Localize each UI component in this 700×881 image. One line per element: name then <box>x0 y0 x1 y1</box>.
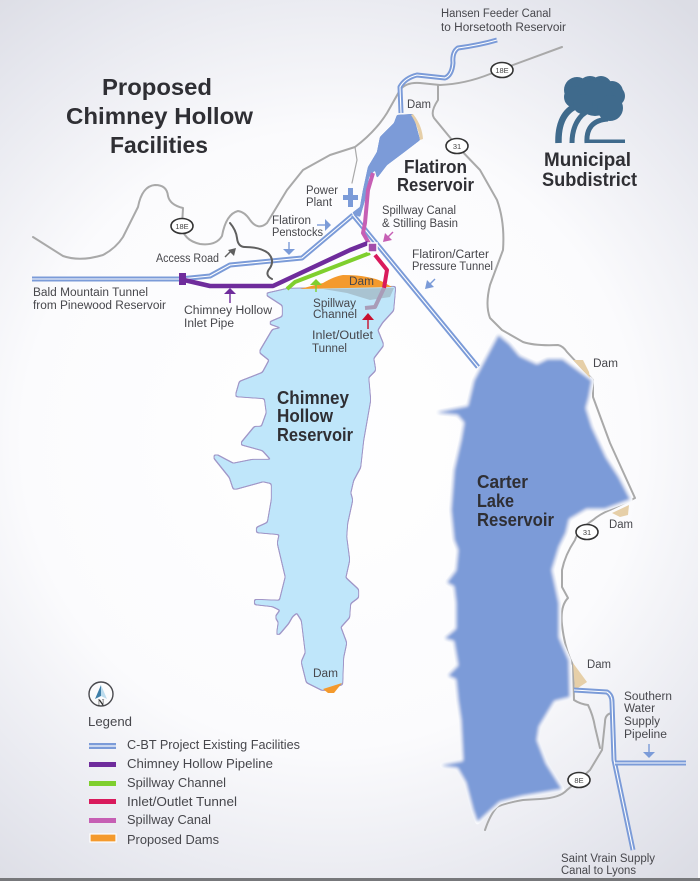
spillway channel <box>287 253 370 289</box>
icon: north compass <box>89 682 113 708</box>
road: 31 <box>433 85 635 748</box>
label: Spillway Channel <box>313 298 357 321</box>
label: Flatiron/Carter Pressure Tunnel <box>412 249 493 273</box>
label: Chimney Hollow Reservoir <box>277 388 353 445</box>
label: Chimney Hollow Inlet Pipe: Inlet Pipe <box>184 318 234 330</box>
label: proposed dam north: Dam <box>349 276 374 288</box>
legend item: Inlet/Outlet Tunnel <box>89 795 237 809</box>
label: Flatiron Reservoir: Reservoir <box>397 175 474 195</box>
arrow: inlet pipe <box>224 288 236 303</box>
label: Power Plant: Plant <box>306 197 333 209</box>
label: Bald Mountain Tunnel: Bald Mountain Tunnel <box>33 287 148 299</box>
arrow: pressure tunnel <box>425 279 435 289</box>
label: Chimney Hollow Reservoir: Reservoir <box>277 425 353 445</box>
label: Chimney Hollow dam south: Dam <box>313 668 338 680</box>
reservoir: Chimney Hollow <box>214 287 395 690</box>
label: Southern Water Supply Pipeline: Supply <box>624 716 660 728</box>
label: Inlet/Outlet Tunnel <box>312 330 374 355</box>
road: power plant spur <box>352 147 357 183</box>
highway shields <box>171 62 598 788</box>
label: Hansen Feeder Canal: to Horsetooth Reservoir <box>441 22 566 34</box>
shield: 31 north <box>446 138 468 154</box>
label: Flatiron Reservoir <box>397 157 474 195</box>
arrow: southern pipeline <box>643 744 655 758</box>
arrow: penstocks down <box>283 242 295 255</box>
shield: 18E north: 18E <box>495 66 509 75</box>
arrow: access road <box>225 248 236 257</box>
legend item: Spillway Canal <box>89 813 211 827</box>
label: Southern Water Supply Pipeline: Water <box>624 703 655 715</box>
title <box>66 74 253 158</box>
icon: power plant <box>343 188 358 207</box>
label: Spillway Canal and Stilling Basin <box>382 205 458 230</box>
legend item: Proposed Dams: Proposed Dams <box>127 833 219 847</box>
title: Proposed <box>102 74 212 100</box>
shield: 8E <box>568 772 590 788</box>
proposed dam: south <box>323 683 342 693</box>
arrows <box>224 219 655 758</box>
shield: 31 south: 31 <box>583 528 591 537</box>
label: Carter dam north: Dam <box>593 358 618 370</box>
label: Chimney Hollow Inlet Pipe <box>184 305 273 330</box>
road: 18E <box>33 47 562 259</box>
label: Chimney Hollow Reservoir: Chimney <box>277 388 349 408</box>
stilling basin <box>368 243 377 252</box>
label: Carter Lake Reservoir: Carter <box>477 472 528 492</box>
shield: 31 north: 31 <box>453 142 461 151</box>
inlet/outlet tunnel <box>365 255 387 308</box>
legend item: Spillway Channel: Spillway Channel <box>127 776 226 790</box>
label: Power Plant: Power <box>306 185 338 197</box>
label: Flatiron Penstocks <box>272 215 323 239</box>
label: Hansen Feeder Canal: Hansen Feeder Canal <box>441 8 551 20</box>
label: Spillway Channel: Channel <box>313 309 357 321</box>
legend item: Proposed Dams <box>90 833 219 847</box>
shield: 8E: 8E <box>574 776 584 785</box>
legend item: Spillway Channel <box>89 776 226 790</box>
label: Spillway Canal and Stilling Basin: Spillway Canal <box>382 205 456 217</box>
Saint Vrain Supply Canal <box>574 690 633 850</box>
proposed dam: north <box>300 275 394 300</box>
legend item: Inlet/Outlet Tunnel: Inlet/Outlet Tunnel <box>127 795 237 809</box>
reservoir: Carter Lake <box>437 333 632 824</box>
label: Bald Mountain Tunnel <box>33 287 166 312</box>
label: Flatiron Penstocks: Penstocks <box>272 227 323 239</box>
icon: north compass: N <box>98 698 105 708</box>
label: Carter Lake Reservoir: Lake <box>477 491 514 511</box>
title: Facilities <box>110 132 208 158</box>
shield: 31 south <box>576 524 598 540</box>
label: Southern Water Supply Pipeline <box>624 691 672 741</box>
dam: Carter east <box>612 505 629 517</box>
label: Chimney Hollow Inlet Pipe: Chimney Hollow <box>184 305 273 317</box>
label: Carter Lake Reservoir <box>477 472 554 530</box>
label: Carter dam east: Dam <box>609 519 633 531</box>
arrow: spillway channel <box>310 279 322 292</box>
shield: 18E north <box>491 62 513 78</box>
Bald Mountain Tunnel and Flatiron Penstocks <box>32 215 353 279</box>
label: Southern Water Supply Pipeline: Southern <box>624 691 672 703</box>
label: Bald Mountain Tunnel: from Pinewood Reservoir <box>33 300 166 312</box>
label: Carter Lake Reservoir: Reservoir <box>477 510 554 530</box>
label: Chimney Hollow Reservoir: Hollow <box>277 406 334 426</box>
arrow: spillway canal <box>383 232 393 242</box>
shield: 18E west: 18E <box>175 222 189 231</box>
heading: Municipal Subdistrict: Municipal <box>544 150 631 171</box>
heading: Municipal Subdistrict: Subdistrict <box>542 170 638 191</box>
dam: Flatiron <box>411 114 423 140</box>
label: Carter dam south: Dam <box>587 659 611 671</box>
Chimney Hollow pipeline <box>184 243 368 286</box>
label: Flatiron/Carter Pressure Tunnel: Pressure Tunnel <box>412 261 493 273</box>
label: Saint Vrain Supply Canal: Canal to Lyons <box>561 865 636 877</box>
label: Spillway Canal and Stilling Basin: & Stilling Basin <box>382 218 458 230</box>
label: Access Road: Access Road <box>156 253 219 265</box>
legend item: Chimney Hollow Pipeline: Chimney Hollow Pipeline <box>127 757 273 771</box>
legend item: Spillway Canal: Spillway Canal <box>127 813 211 827</box>
label: Flatiron dam: Dam <box>407 99 431 111</box>
reservoir: Flatiron <box>352 114 420 217</box>
Southern Water Supply Pipeline <box>615 760 686 766</box>
spillway canal <box>363 173 373 245</box>
road: 8E <box>485 713 612 830</box>
legend <box>88 714 300 847</box>
legend item: C-BT Project Existing Facilities: C-BT Project Existing Facilities <box>127 738 300 752</box>
label: Inlet/Outlet Tunnel: Inlet/Outlet <box>312 330 374 342</box>
label: Saint Vrain Supply Canal: Saint Vrain Supply <box>561 853 655 865</box>
access road <box>230 223 272 279</box>
label: Inlet/Outlet Tunnel: Tunnel <box>312 343 347 355</box>
arrow: inlet/outlet tunnel <box>362 313 374 329</box>
label: Flatiron Reservoir: Flatiron <box>404 157 467 177</box>
icon: Municipal Subdistrict tree <box>558 76 625 143</box>
label: Flatiron Penstocks: Flatiron <box>272 215 311 227</box>
roads <box>33 47 635 830</box>
Hansen Feeder Canal <box>400 40 497 113</box>
label: Spillway Channel: Spillway <box>313 298 356 310</box>
Flatiron/Carter Pressure Tunnel <box>353 215 478 367</box>
label: Flatiron/Carter Pressure Tunnel: Flatiron/Carter <box>412 249 489 261</box>
dam: Carter south <box>573 663 587 690</box>
label: Saint Vrain Supply Canal <box>561 853 655 877</box>
heading: Municipal Subdistrict <box>542 150 638 191</box>
dam: Carter north <box>573 360 590 378</box>
shield: 18E west <box>171 218 193 234</box>
label: Power Plant <box>306 185 338 209</box>
legend heading: Legend <box>88 714 132 729</box>
arrow: penstocks right <box>317 219 331 231</box>
existing dams <box>411 114 629 690</box>
pipeline terminal block <box>179 273 186 285</box>
label: Hansen Feeder Canal <box>441 8 566 34</box>
title: Chimney Hollow <box>66 103 253 129</box>
label: Southern Water Supply Pipeline: Pipeline <box>624 729 667 741</box>
